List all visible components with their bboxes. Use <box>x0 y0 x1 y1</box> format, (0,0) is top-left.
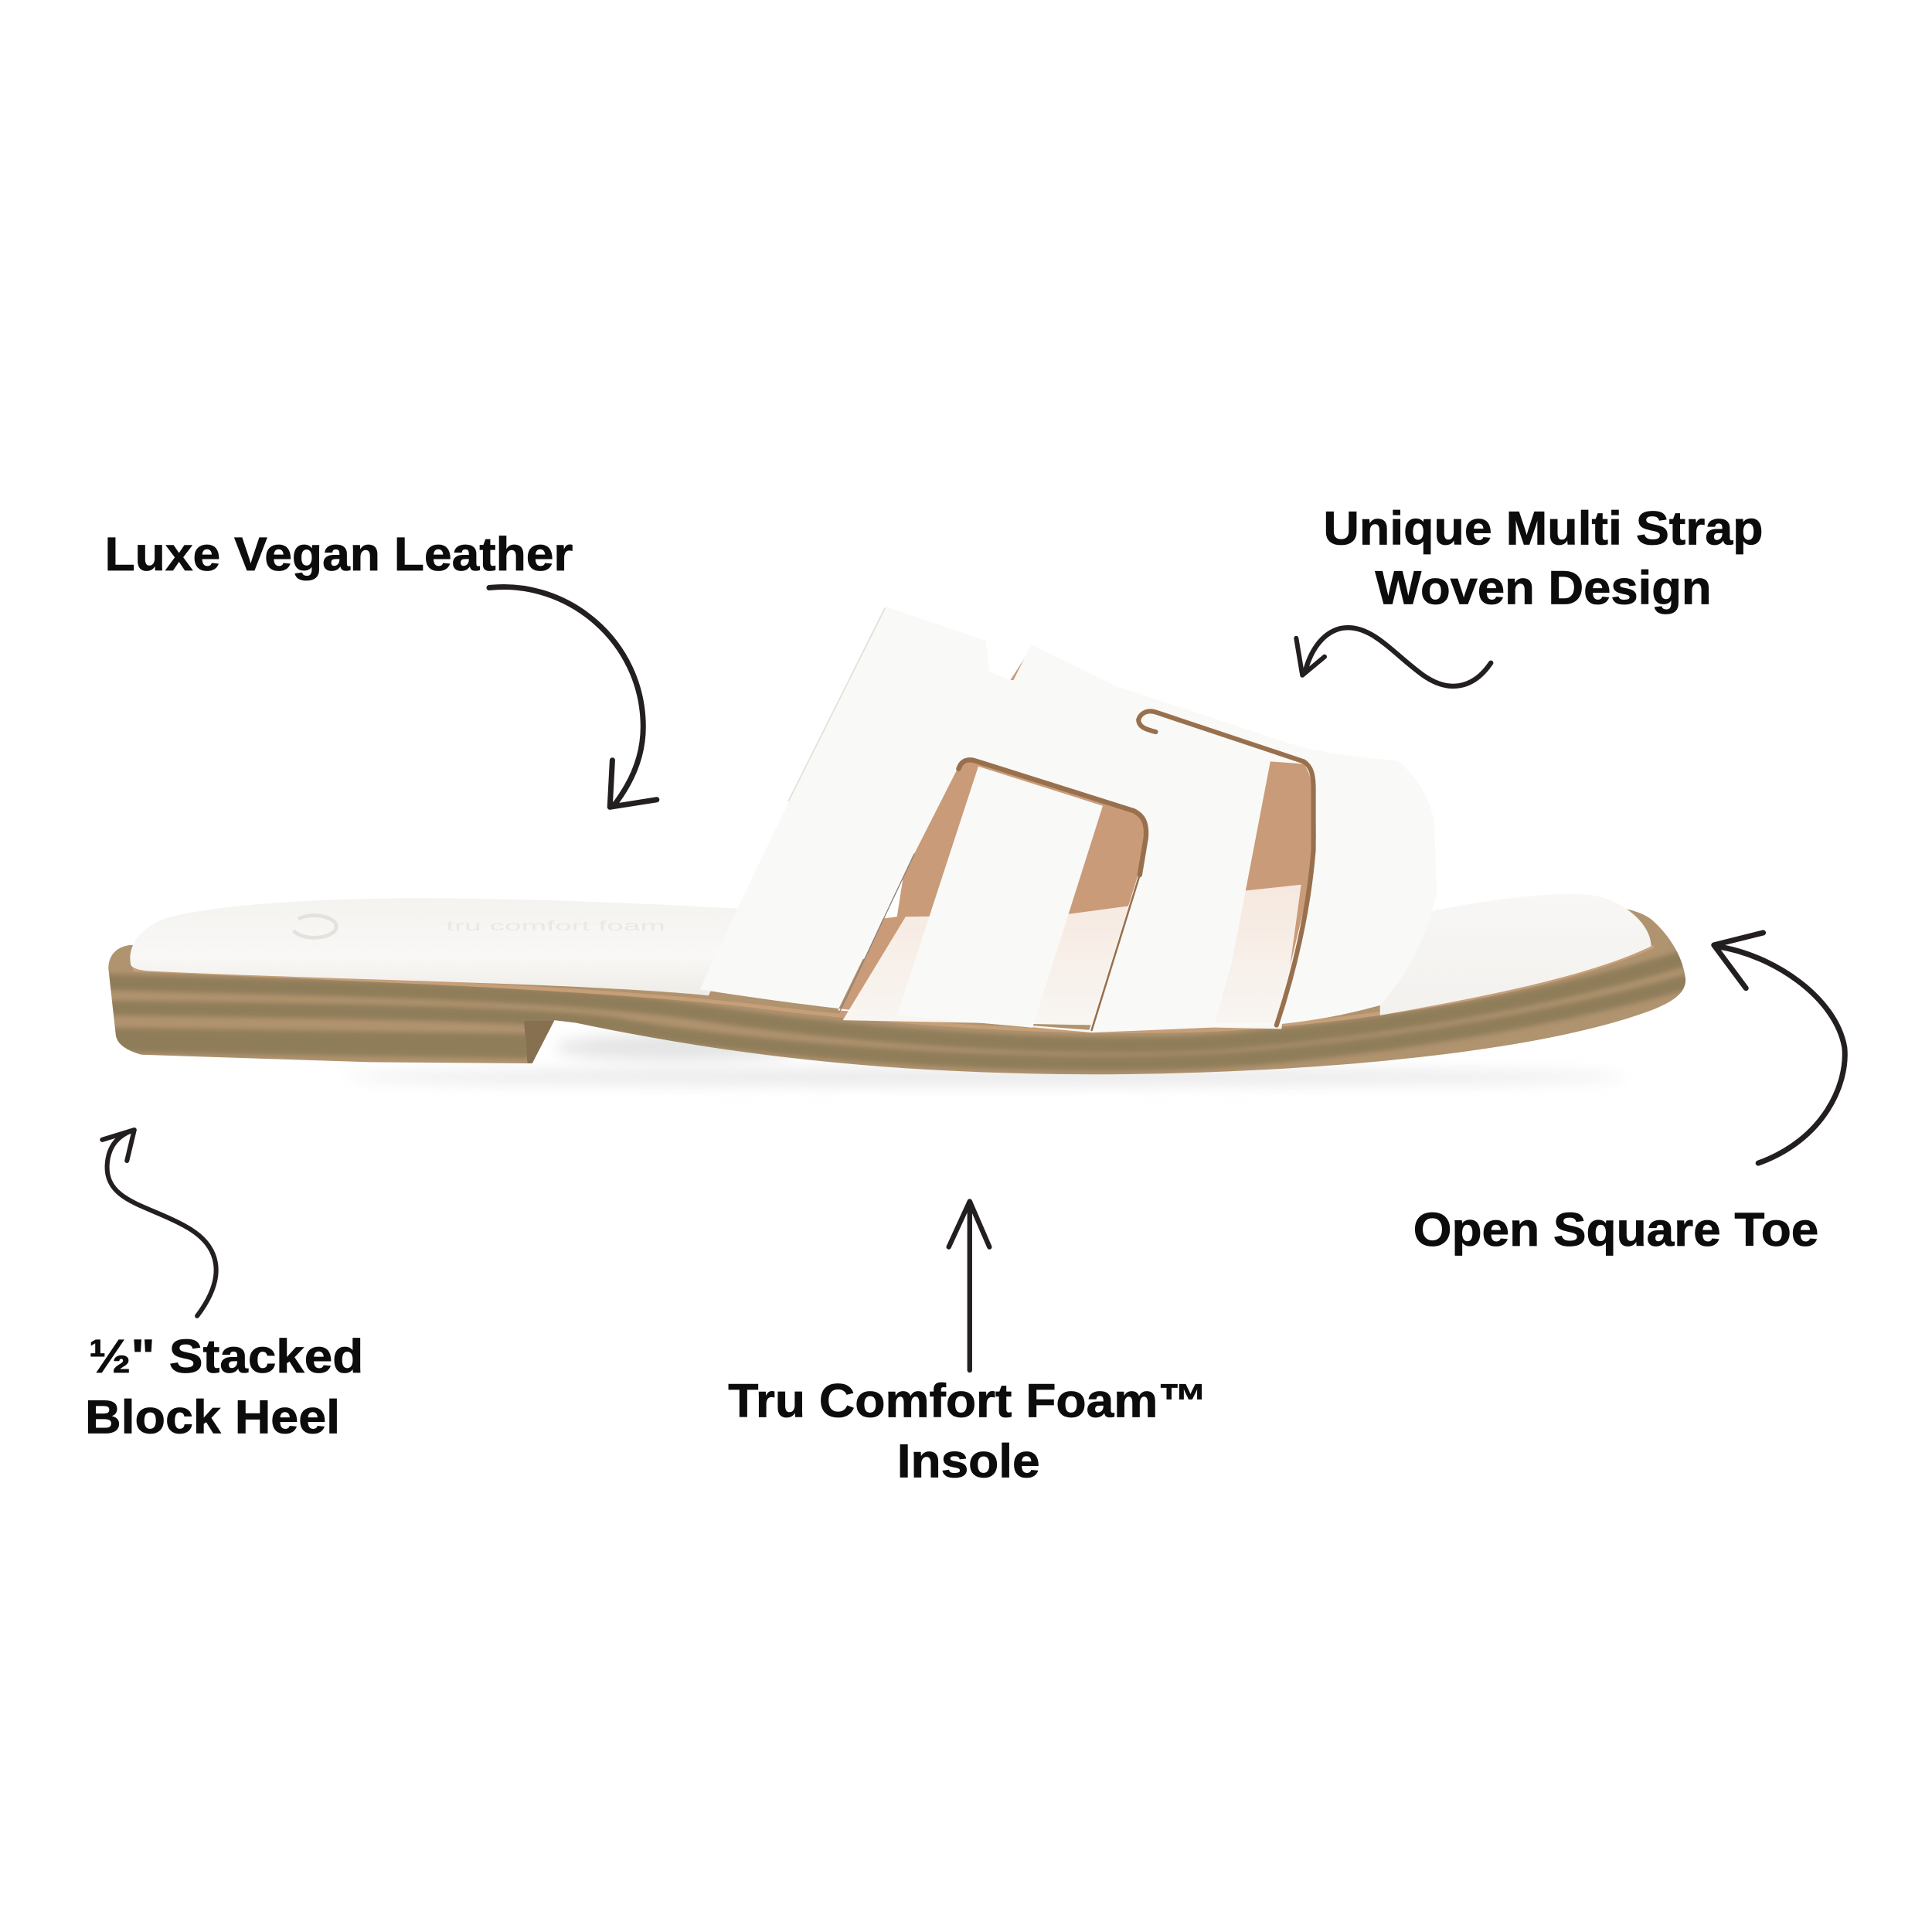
arrow to insole <box>949 1202 989 1370</box>
label: Tru Comfort Foam Insole <box>728 1375 1207 1488</box>
cut edges <box>788 609 1314 1030</box>
label: stacked block heel: ½" Stacked <box>89 1330 363 1383</box>
label: Unique Multi Strap Woven Design: Unique Multi Strap <box>1323 502 1764 556</box>
sandal <box>105 606 1691 1074</box>
label: stacked block heel <box>85 1330 363 1444</box>
main strap <box>700 606 1437 1032</box>
arrow to square toe <box>1714 933 1845 1163</box>
arrow to vegan leather upper <box>489 587 657 807</box>
insole logo <box>292 916 665 937</box>
insole toe section <box>1380 894 1651 1015</box>
label: Tru Comfort Foam Insole: Tru Comfort Foam™ <box>728 1375 1208 1428</box>
strap interior <box>838 645 1326 1029</box>
label: Unique Multi Strap Woven Design: Woven Design <box>1375 561 1712 614</box>
arrow to heel <box>102 1130 216 1316</box>
insole heel section <box>130 898 752 995</box>
label: Open Square Toe: Open Square Toe <box>1413 1203 1818 1257</box>
label: Luxe Vegan Leather: Luxe Vegan Leather <box>105 528 573 581</box>
sandal sole <box>105 906 1691 1074</box>
heel breast <box>524 1020 554 1063</box>
label: stacked block heel: Block Heel <box>85 1390 340 1444</box>
centre strap <box>897 767 1103 1028</box>
insole logo: tru comfort foam <box>446 918 665 934</box>
label: Tru Comfort Foam Insole: Insole <box>897 1435 1040 1488</box>
label: Unique Multi Strap Woven Design <box>1323 502 1764 614</box>
ground shadow <box>345 1034 1627 1086</box>
wavy arrow to straps <box>1296 628 1491 686</box>
